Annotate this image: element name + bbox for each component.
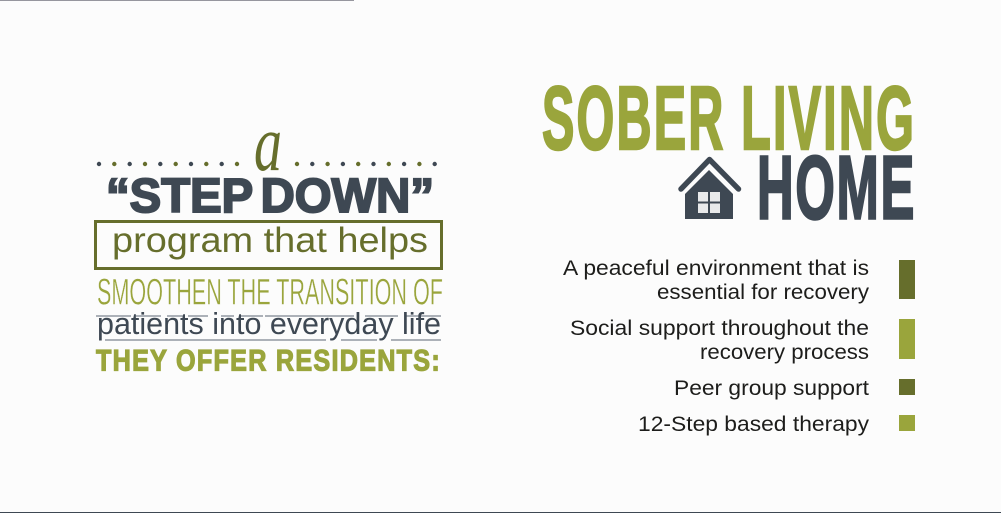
heading: step down: “STEP DOWN” — [106, 170, 434, 223]
item: peer group support: Peer group support — [674, 377, 869, 400]
item: 12-step therapy: 12-Step based therapy — [638, 413, 870, 436]
ruled text: patients into everyday life: patients into everyday life — [97, 306, 441, 341]
script letter a: a — [254, 100, 282, 188]
item: social support — [570, 317, 915, 364]
item: peaceful environment: A peaceful environment that is — [563, 257, 869, 280]
item: peaceful environment: essential for recovery — [657, 281, 870, 304]
boxed text: program that helps — [96, 221, 442, 268]
list: residents benefits — [563, 257, 915, 436]
item: peaceful environment — [563, 257, 915, 304]
icon: house — [681, 160, 738, 219]
item: social support: Social support throughout the — [570, 317, 869, 340]
text: smoothen the transition of: SMOOTHEN THE TRANSITION OF — [97, 270, 443, 312]
panel: sober living home — [542, 69, 916, 238]
dotted divider — [97, 162, 437, 166]
panel: step down description — [96, 100, 443, 378]
text: they offer residents: THEY OFFER RESIDENTS: — [96, 344, 441, 378]
boxed text: program that helps: program that helps — [112, 221, 428, 260]
item: social support: recovery process — [700, 341, 869, 364]
